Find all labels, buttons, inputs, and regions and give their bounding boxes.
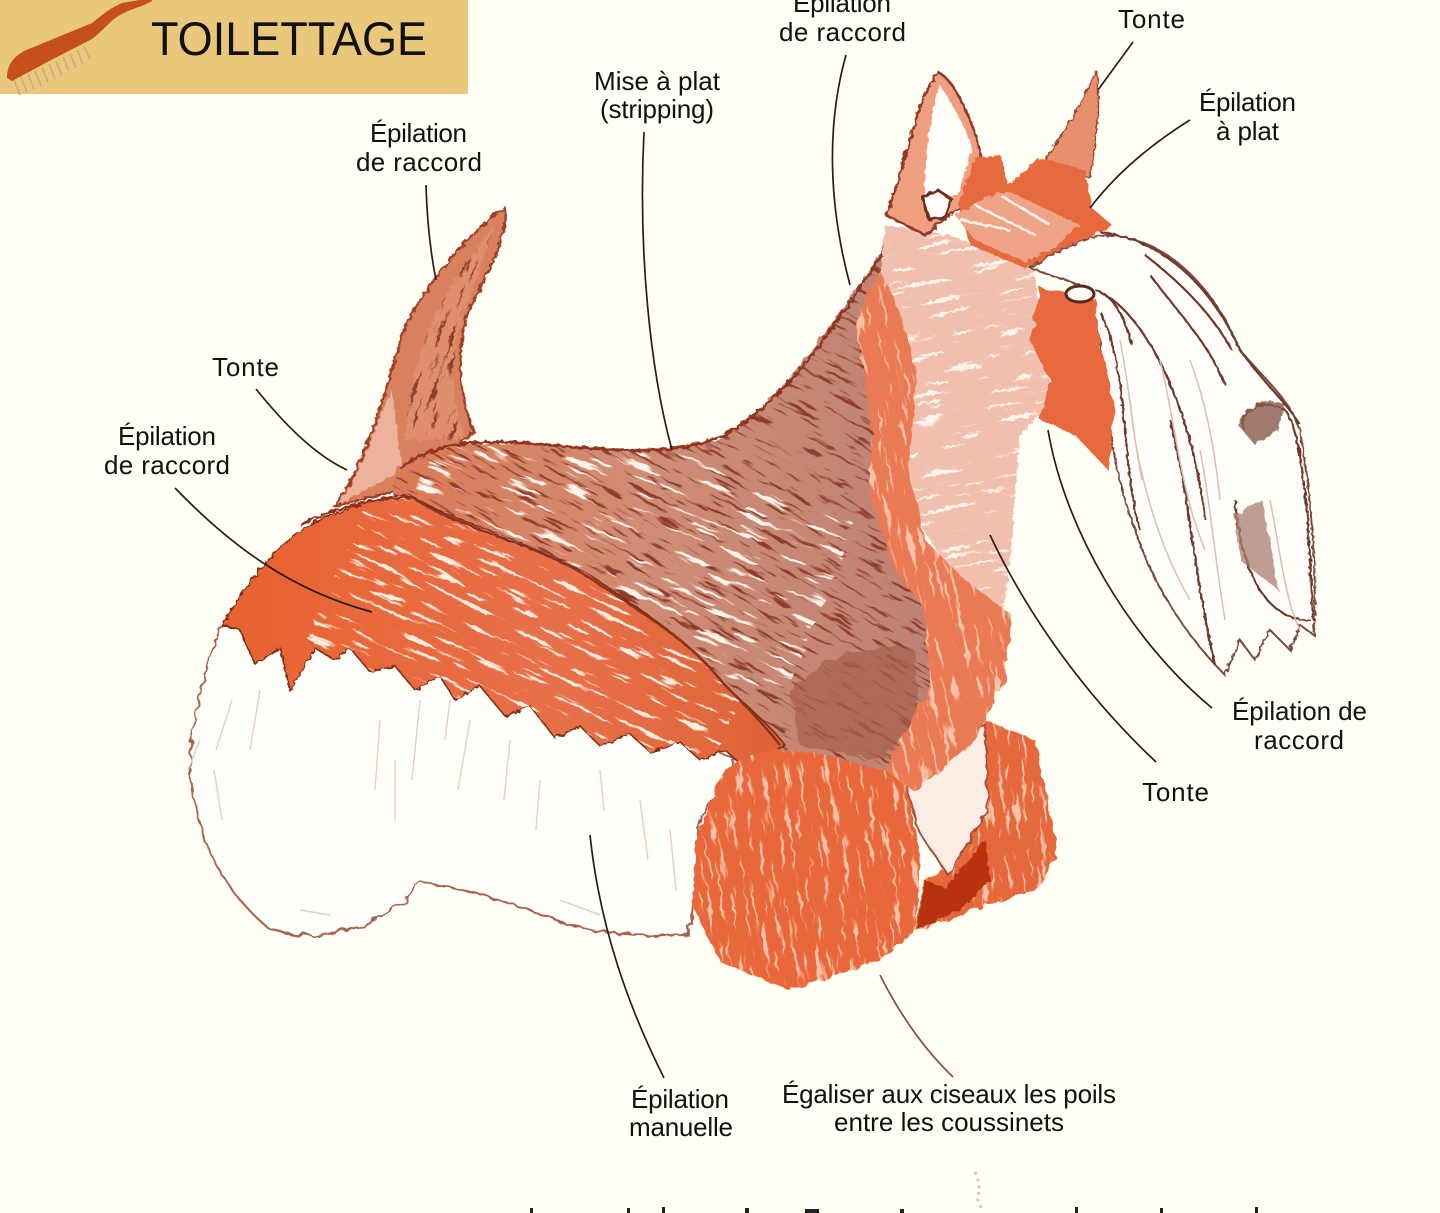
ear base white tuft	[922, 190, 952, 220]
label: epilation manuelle: manuelle	[629, 1112, 733, 1142]
beard hair strokes	[1095, 232, 1313, 665]
label: tonte, tail base: Tonte	[212, 352, 279, 382]
white muzzle fall	[1030, 235, 1315, 675]
nose and goatee	[1238, 401, 1285, 445]
label: tonte, ear: Tonte	[1118, 4, 1185, 34]
rear foreleg	[692, 748, 920, 990]
label: epilation a plat: Épilation	[1199, 87, 1296, 117]
icon: grooming comb	[7, 0, 152, 95]
head top	[955, 155, 1112, 268]
leader lines	[175, 42, 1212, 1078]
label: egaliser aux ciseaux: entre les coussinets	[834, 1107, 1064, 1137]
label: mise a plat: (stripping)	[600, 94, 714, 124]
label: epilation de raccord, rump: de raccord	[104, 450, 230, 480]
pale neck and chest	[880, 225, 1050, 608]
label: epilation de raccord, neck	[779, 0, 906, 47]
label: epilation de raccord, tail: Épilation	[370, 118, 467, 148]
heading: TOILETTAGE	[151, 12, 427, 65]
label: epilation de raccord, neck: de raccord	[779, 17, 906, 47]
label: mise a plat	[594, 66, 721, 124]
darker flank	[790, 646, 920, 760]
label: epilation de raccord, tail	[356, 118, 482, 177]
label: epilation manuelle	[629, 1084, 733, 1142]
label: tonte, chest: Tonte	[1142, 777, 1209, 807]
label: egaliser aux ciseaux: Égaliser aux ciseaux les poils	[782, 1079, 1116, 1109]
label: epilation de raccord, jaw: Épilation de	[1232, 696, 1367, 726]
hindquarters white coat	[190, 610, 735, 936]
dark toe shadow	[916, 840, 990, 930]
label: epilation de raccord, jaw: raccord	[1254, 725, 1344, 755]
label: epilation manuelle: Épilation	[631, 1084, 729, 1114]
front foreleg	[914, 720, 1058, 930]
label: egaliser aux ciseaux	[782, 1079, 1116, 1137]
tail	[332, 206, 507, 508]
banner: toilettage header	[0, 0, 468, 95]
orange chest ruff	[856, 270, 1012, 792]
label: epilation de raccord, rump	[104, 421, 230, 480]
orange saddle	[221, 494, 786, 762]
illustration: terrier	[188, 44, 1315, 1067]
label: epilation de raccord, tail: de raccord	[356, 147, 482, 177]
hair strokes on white coat	[188, 690, 676, 915]
label: epilation de raccord, jaw	[1232, 696, 1367, 755]
back outline	[400, 245, 888, 468]
left ear	[886, 72, 982, 235]
saddle ridge line	[300, 497, 780, 745]
label: epilation de raccord, rump: Épilation	[118, 421, 216, 451]
right ear	[1045, 70, 1098, 178]
label: epilation a plat: à plat	[1216, 116, 1280, 146]
eye	[1066, 286, 1094, 302]
white chest tuft	[905, 725, 988, 875]
label: mise a plat: Mise à plat	[594, 66, 721, 96]
label: epilation a plat	[1199, 87, 1296, 146]
stripped body	[392, 244, 930, 771]
cheek orange patch	[1030, 288, 1115, 470]
